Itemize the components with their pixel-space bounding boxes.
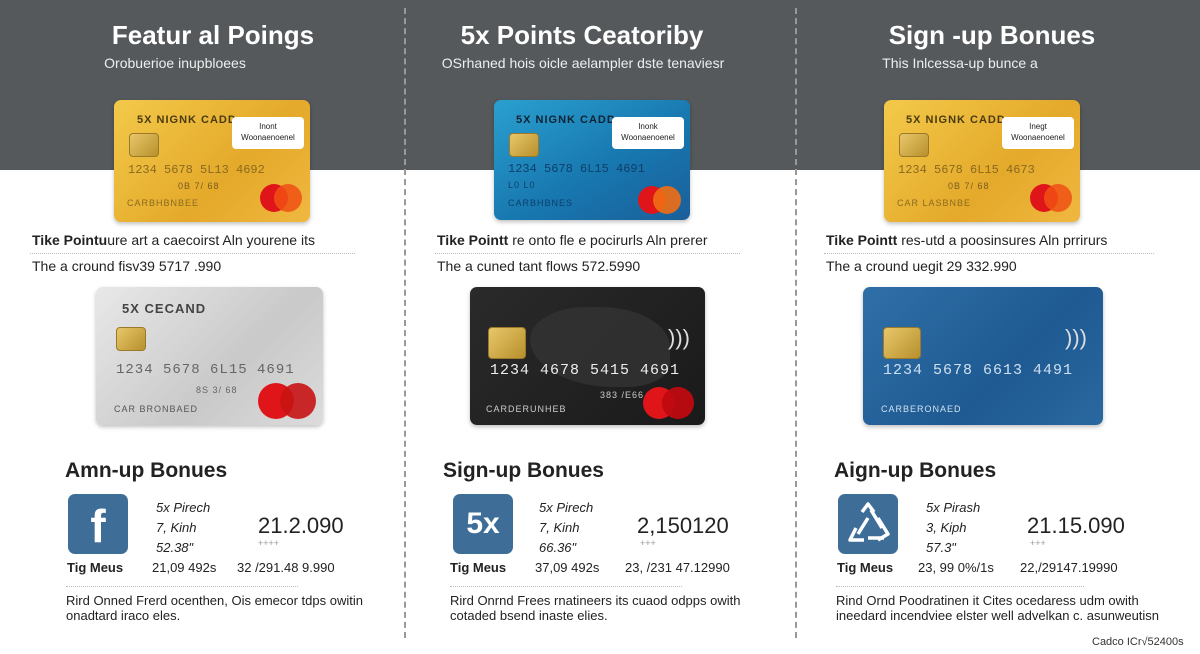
card: blue top: 1234 5678 6L15 4691 [508, 162, 645, 176]
text: ++++ [258, 538, 279, 548]
card: blue top [494, 100, 690, 220]
text line 1 col3: Tike Pointt res-utd a poosinsures Aln prrirurs [826, 232, 1107, 248]
text: 21,09 492s [152, 560, 216, 575]
card: blue top: 5X NIGNK CADD [516, 114, 616, 126]
paragraph col2: cotaded bsend inaste elies. [450, 608, 608, 623]
stats col3 [926, 500, 980, 555]
text line 2 col3: The a cround uegit 29 332.990 [826, 258, 1017, 274]
stats col2: 7, Kinh [539, 520, 579, 535]
card: gold top 3: CAR LASBNBE [897, 198, 971, 208]
card: gold top 3: 1234 5678 6L15 4673 [898, 163, 1035, 177]
text: Tig Meus [837, 560, 893, 575]
card: gold top 1: 1234 5678 5L13 4692 [128, 163, 265, 177]
text: +++ [640, 538, 656, 548]
stats col3: 3, Kiph [926, 520, 966, 535]
card: gold top 1: CARBHBNBEE [127, 198, 199, 208]
icon: facebook: f [90, 500, 106, 552]
footer note: Cadco ICr√52400s [1092, 636, 1184, 648]
text: 21.2.090 [258, 513, 344, 538]
text: 23, /231 47.12990 [625, 560, 730, 575]
stats col1 [156, 500, 210, 555]
card: gold top 1: Woonaenoenel [241, 133, 295, 142]
text: 21.15.090 [1027, 513, 1125, 538]
card: gold top 3: 5X NIGNK CADD [906, 114, 1006, 126]
stats col3: 5x Pirash [926, 500, 980, 515]
text line 2 col1: The a cround fisv39 5717 .990 [32, 258, 221, 274]
card: blue top: Woonaenoenel [621, 133, 675, 142]
card: gold top 1: 0B 7/ 68 [178, 181, 220, 191]
card: black: 1234 4678 5415 4691 [490, 362, 680, 379]
card: blue bottom: ))) [1065, 325, 1087, 350]
text: 37,09 492s [535, 560, 599, 575]
paragraph col2 [450, 593, 740, 623]
text line 1 col2: Tike Pointt re onto fle e pocirurls Aln prerer [437, 232, 708, 248]
card: gold top 3 [884, 100, 1080, 222]
card: blue bottom [863, 287, 1103, 425]
stats col1: 5x Pirech [156, 500, 210, 515]
heading col3: Aign-up Bonues [834, 459, 996, 482]
text: 22,/29147.19990 [1020, 560, 1118, 575]
card: silver: CAR BRONBAED [114, 404, 198, 414]
column 1 subtitle: Orobuerioe inupbloees [104, 55, 246, 71]
paragraph col3 [836, 593, 1159, 623]
card: silver [96, 287, 323, 425]
card: gold top 1: 5X NIGNK CADD [137, 114, 237, 126]
paragraph col1: onadtard iraco eles. [66, 608, 180, 623]
stats col2: 66.36" [539, 540, 576, 555]
text: 23, 99 0%/1s [918, 560, 994, 575]
card: black: ))) [668, 325, 690, 350]
card: silver: 8S 3/ 68 [196, 385, 238, 395]
card: blue bottom: CARBERONAED [881, 404, 962, 414]
text: 32 /291.48 9.990 [237, 560, 335, 575]
icon: facebook [68, 494, 128, 554]
card: blue top: Inonk [638, 122, 658, 131]
stats col1: 52.38" [156, 540, 193, 555]
column 1 title: Featur al Poings [112, 20, 314, 50]
icon: 5x: 5x [466, 507, 500, 540]
column 3 subtitle: This Inlcessa-up bunce a [882, 55, 1038, 71]
column 3 title: Sign -up Bonues [889, 20, 1095, 50]
card: gold top 3: Woonaenoenel [1011, 133, 1065, 142]
text line 2 col2: The a cuned tant flows 572.5990 [437, 258, 640, 274]
paragraph col2: Rird Onrnd Frees rnatineers its cuaod odpps owith [450, 593, 740, 608]
text line 1 col1: Tike Pointuure art a caecoirst Aln yourene its [32, 232, 315, 248]
column 2 subtitle: OSrhaned hois oicle aelampler dste tenaviesr [442, 55, 724, 71]
stats col1: 7, Kinh [156, 520, 196, 535]
text: 2,150120 [637, 513, 729, 538]
stats col2 [539, 500, 593, 555]
paragraph col1: Rird Onned Frerd ocenthen, Ois emecor tdps owitin [66, 593, 363, 608]
paragraph col1 [66, 593, 363, 623]
card: gold top 3: Inegt [1029, 122, 1047, 131]
card: blue top: CARBHBNES [508, 198, 573, 208]
card: blue top: L0 L0 [508, 180, 536, 190]
icon: 5x [453, 494, 513, 554]
heading col1: Amn-up Bonues [65, 459, 227, 482]
card: gold top 3: 0B 7/ 68 [948, 181, 990, 191]
card: gold top 1: Inont [259, 122, 277, 131]
card: silver: 1234 5678 6L15 4691 [116, 362, 295, 378]
text: Tig Meus [450, 560, 506, 575]
icon: recycle [838, 494, 898, 554]
text: Tig Meus [67, 560, 123, 575]
paragraph col3: ineedard incendviee elster well advelkan c. asunweutisn [836, 608, 1159, 623]
heading col2: Sign-up Bonues [443, 459, 604, 482]
card: gold top 1 [114, 100, 310, 222]
text: +++ [1030, 538, 1046, 548]
card: black: CARDERUNHEB [486, 404, 567, 414]
stats col2: 5x Pirech [539, 500, 593, 515]
header band [0, 0, 1200, 170]
paragraph col3: Rind Ornd Poodratinen it Cites ocedaress udm owith [836, 593, 1139, 608]
stats col3: 57.3" [926, 540, 956, 555]
column 2 title: 5x Points Ceatoriby [461, 20, 703, 50]
card: silver: 5X CECAND [122, 301, 206, 316]
card: black: 383 /E66 [600, 390, 644, 400]
card: black [470, 287, 705, 425]
card: blue bottom: 1234 5678 6613 4491 [883, 362, 1073, 379]
